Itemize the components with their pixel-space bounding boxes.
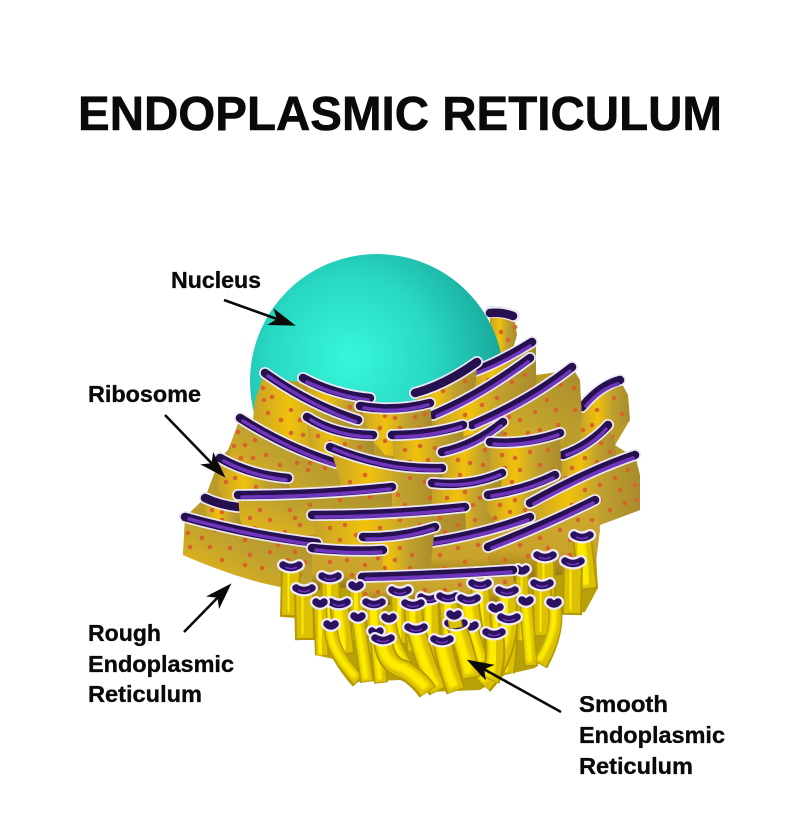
diagram: endoplasmic reticulum (183, 254, 640, 692)
smooth endoplasmic reticulum tubes, middle and front rows (316, 583, 558, 692)
label: Rough Endoplasmic Reticulum: Rough (88, 620, 161, 646)
label: Smooth Endoplasmic Reticulum: Endoplasmic (579, 722, 725, 748)
arrow: to nucleus (224, 300, 291, 324)
sheet behind nucleus (490, 312, 517, 358)
label: Rough Endoplasmic Reticulum (88, 587, 234, 707)
label: Rough Endoplasmic Reticulum: Reticulum (88, 681, 202, 707)
backing mass of the sheets (183, 345, 640, 590)
title: ENDOPLASMIC RETICULUM (78, 88, 722, 141)
label: Smooth Endoplasmic Reticulum (471, 662, 725, 779)
arrow: to rough ER (184, 587, 228, 632)
nucleus (250, 254, 504, 508)
arrow: to ribosome (165, 415, 222, 474)
backing mass of the smooth tubes (281, 540, 598, 692)
arrow: to smooth ER (471, 662, 561, 712)
label: Nucleus: Nucleus (171, 267, 261, 293)
label: Ribosome: Ribosome (88, 381, 201, 407)
label: Rough Endoplasmic Reticulum: Endoplasmic (88, 651, 234, 677)
label: Smooth Endoplasmic Reticulum: Smooth (579, 691, 668, 717)
smooth endoplasmic reticulum tubes, back row (283, 535, 590, 640)
label: Ribosome (88, 381, 222, 474)
label: Smooth Endoplasmic Reticulum: Reticulum (579, 753, 693, 779)
label: Nucleus (171, 267, 291, 324)
rough sheet with tubes in front (362, 570, 515, 605)
rough endoplasmic reticulum sheets (183, 342, 640, 590)
